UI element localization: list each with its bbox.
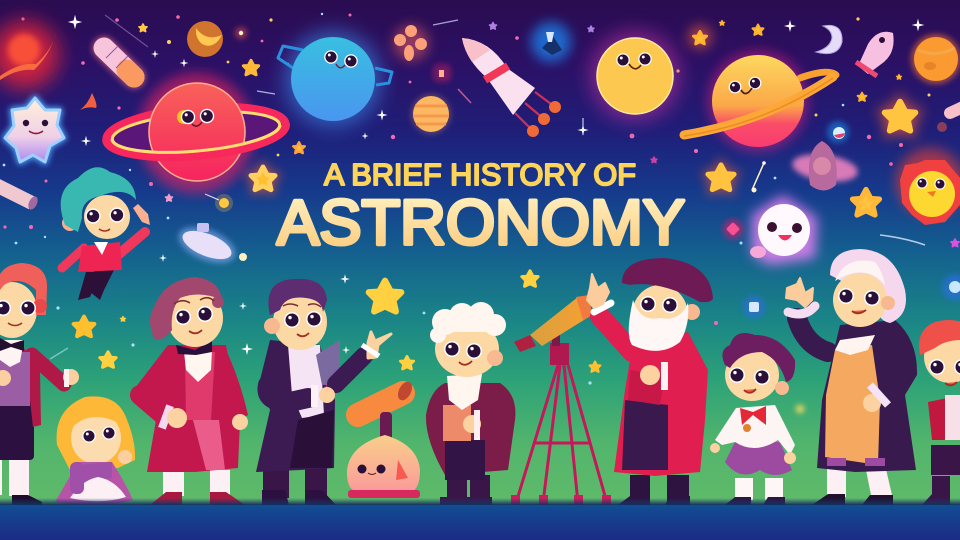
title: ASTRONOMY	[277, 188, 685, 258]
icon: blue diamond nebula	[531, 22, 571, 62]
icon: crescent moon	[816, 25, 842, 54]
icon: orange crescent planet	[187, 21, 223, 57]
icon: ringed yellow saturn	[684, 51, 836, 151]
icon: white smiling ghost star	[723, 195, 817, 265]
character: left man with red hair	[0, 263, 79, 505]
character: bearded man with tricorn hat	[587, 258, 713, 505]
icon: pink capsule	[104, 46, 134, 77]
icon: small stars top right	[688, 20, 902, 101]
character: man in dark coat with prism	[256, 279, 391, 505]
icon: left telescope piece	[0, 184, 40, 211]
icon: orange planet	[911, 34, 960, 84]
icon: blue glowing sprites	[743, 274, 960, 413]
icon: gold star row	[74, 162, 879, 372]
icon: blue planet with handles	[278, 31, 392, 127]
small red star shapes	[80, 24, 305, 153]
tripod legs	[516, 365, 607, 503]
character: man with powdered wig	[786, 249, 917, 505]
character: flying kid with teal hair	[61, 167, 150, 300]
scattered sky sparkles	[3, 13, 959, 405]
title	[277, 157, 685, 258]
icon: pink mini rocket	[856, 32, 894, 76]
character: telescope robot	[347, 379, 420, 498]
title: A BRIEF HISTORY OF	[324, 157, 636, 192]
character: man in crimson coat	[132, 277, 248, 505]
icon: clover nebula	[393, 25, 429, 61]
icon: yellow smiling sun	[591, 32, 679, 120]
character: right edge boy	[919, 320, 960, 505]
icon: rocket	[462, 38, 561, 137]
character: man with white curly hair	[426, 302, 515, 505]
floor	[0, 498, 960, 540]
character: boy with red bow tie	[710, 333, 796, 505]
icon: star ghost	[5, 98, 64, 162]
icon: white spaceship	[174, 220, 247, 270]
icon: ringed red planet	[104, 73, 288, 193]
icon: red nebula planet	[0, 21, 59, 89]
icon: right edge capsule and orb	[827, 106, 960, 143]
telescope on tripod	[511, 295, 611, 506]
icon: glowing star right	[881, 98, 919, 134]
character: blonde girl	[55, 396, 135, 506]
icon: striped small planet	[411, 94, 451, 134]
icon: pink ghost planet	[791, 141, 859, 190]
icon: red flower sun with chick	[896, 148, 960, 225]
